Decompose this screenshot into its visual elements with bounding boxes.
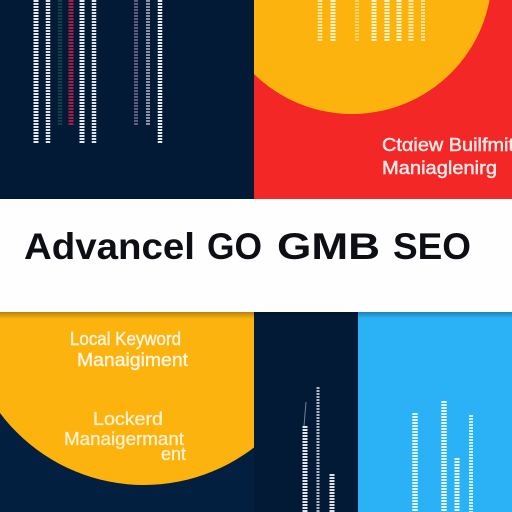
label: top right: Ctαiew Builfmit	[382, 135, 512, 155]
label: top right: Maniaglenirg	[382, 158, 497, 178]
title	[24, 226, 471, 267]
yellow circle	[254, 0, 490, 114]
vertical text strips: bottom centre	[305, 387, 332, 512]
panel: top left navy	[0, 0, 254, 199]
thin strip tail	[304, 402, 306, 426]
panel: bottom right blue	[358, 312, 512, 512]
vertical text strips: bottom right	[415, 401, 471, 512]
vertical text strips: top left	[36, 0, 160, 144]
panel: bottom left yellow with navy corners	[0, 312, 254, 512]
title: Advancel	[24, 226, 195, 267]
yellow circle	[0, 312, 254, 485]
label: lockerd management	[64, 409, 186, 464]
label: lockerd management: Lockerd	[93, 409, 163, 429]
label: local keyword management: Manaigiment	[77, 350, 188, 370]
title: GO	[207, 226, 262, 267]
vertical text strips: top right	[320, 0, 423, 41]
label: lockerd management: Manaigermant	[64, 429, 184, 449]
title band	[0, 199, 512, 312]
label: local keyword management	[70, 329, 188, 370]
label: top right	[382, 135, 512, 178]
label: lockerd management: ent	[161, 444, 186, 464]
label: local keyword management: Local Keyword	[70, 329, 181, 349]
panel: bottom centre navy	[254, 312, 358, 512]
title: SEO	[393, 226, 471, 267]
title: GMB	[277, 226, 380, 267]
panel: top right red with yellow circle	[254, 0, 512, 199]
